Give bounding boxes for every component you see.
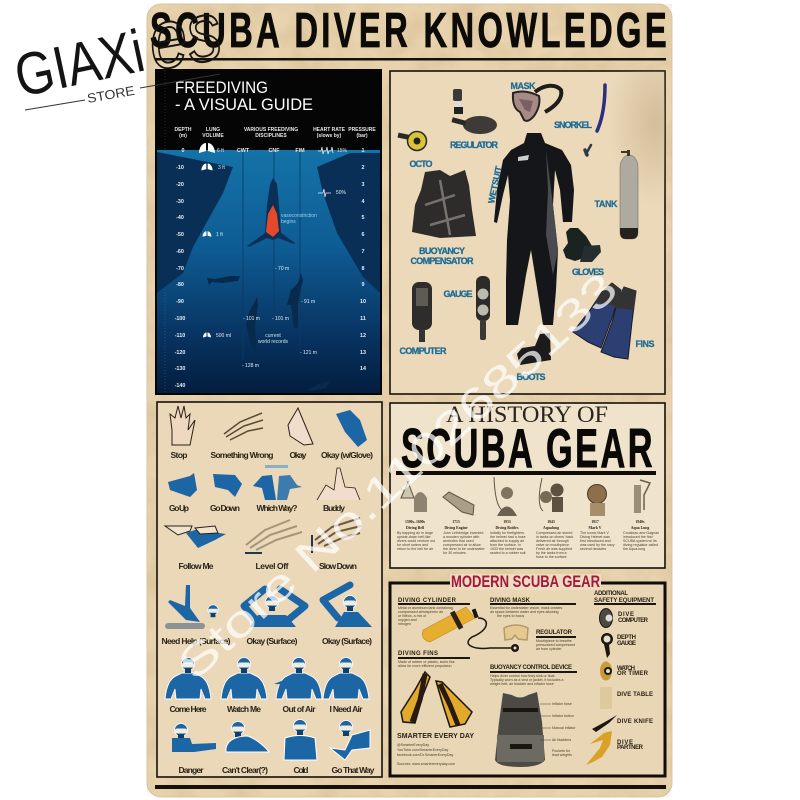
computer xyxy=(412,282,432,342)
history heading: A HISTORY OF xyxy=(446,402,608,427)
store logo: GIAXi xyxy=(9,17,150,110)
depth records: - 128 m xyxy=(242,363,259,369)
pressure scale: 4 xyxy=(362,199,364,205)
history timeline text: Aqua Lung xyxy=(631,526,649,530)
diver signals surface row xyxy=(165,585,372,629)
section text: Helps diver control how they sink or float. xyxy=(490,674,556,678)
history timeline text: John Lethbridge invented xyxy=(443,531,483,535)
history heading: SCUBA GEAR xyxy=(401,417,655,479)
signal labels: Okay (Surface) xyxy=(246,636,298,646)
heart rate xyxy=(318,147,348,197)
depth scale: -50 xyxy=(176,232,184,238)
history timeline text: first introduced and xyxy=(580,539,611,543)
pressure scale: 11 xyxy=(360,316,366,322)
signal labels: Go Down xyxy=(210,503,240,513)
history timeline text: delivered air through xyxy=(536,539,569,543)
world records note xyxy=(258,333,289,345)
section text: air from cylinder xyxy=(536,647,562,651)
depth scale: -80 xyxy=(176,282,184,288)
world records note: current xyxy=(265,333,281,339)
buoyancy compensator xyxy=(412,170,476,238)
section headings: SMARTER EVERY DAY xyxy=(397,733,474,740)
section text: Sources: www.smartereveryday.com xyxy=(397,762,455,766)
store logo xyxy=(9,0,228,110)
world records note: world records xyxy=(258,339,289,345)
depth scale: -130 xyxy=(175,366,185,372)
history timeline text: introduced the first xyxy=(623,535,653,539)
equipment labels: GLOVES xyxy=(572,267,604,277)
history timeline text: by the tanks from a xyxy=(536,551,567,555)
equipment labels: SNORKEL xyxy=(554,120,592,130)
signal labels: Watch Me xyxy=(227,704,261,714)
section text: weight belt, air bladder and inflator hose xyxy=(490,682,554,686)
depth scale: -120 xyxy=(175,350,185,356)
equipment labels: REGULATOR xyxy=(450,140,498,150)
depth scale: -70 xyxy=(176,266,184,272)
watermark: Store No.1102685133 xyxy=(169,263,627,689)
lung volumes: 3 ft xyxy=(218,165,226,171)
signal labels: Out of Air xyxy=(282,704,316,714)
history timeline text: was used by the navy xyxy=(580,543,615,547)
safety equipment labels: OR TIMER xyxy=(617,671,649,677)
signal labels xyxy=(162,450,375,775)
section headings: REGULATOR xyxy=(536,630,573,636)
gloves xyxy=(563,228,601,262)
fish and divers xyxy=(207,273,330,391)
equipment labels: COMPUTER xyxy=(400,346,447,356)
column headers: DEPTH xyxy=(175,127,192,133)
history timeline text: return to the bell for air xyxy=(397,547,434,551)
pressure scale: 10 xyxy=(360,299,366,305)
mask xyxy=(513,86,561,121)
history timeline text: Diving Bell xyxy=(406,526,424,530)
depth scale: -110 xyxy=(175,333,185,339)
diver signals row 4 xyxy=(165,658,369,699)
depth scale: -20 xyxy=(176,182,184,188)
sign background xyxy=(147,4,672,797)
history timeline text: divers could venture out xyxy=(397,539,435,543)
history timeline text: Diving Bottles xyxy=(496,526,519,530)
column headers: VOLUME xyxy=(202,133,224,139)
history timeline text: Diving Engine xyxy=(444,526,468,530)
safety equipment labels: DIVE TABLE xyxy=(617,692,653,698)
signal labels: Go That Way xyxy=(332,765,375,775)
section text: compressed atmospheric air xyxy=(398,610,444,614)
pressure scale: 6 xyxy=(362,232,364,238)
panel: modern scuba gear xyxy=(390,572,665,776)
store logo: STORE xyxy=(86,83,136,106)
history timeline text xyxy=(397,520,659,559)
section headings: BUOYANCY CONTROL DEVICE xyxy=(490,665,572,671)
safety equipment labels: PARTNER xyxy=(617,745,644,751)
section text: pressurized compressed xyxy=(536,643,575,647)
safety equipment labels xyxy=(617,612,653,751)
history heading xyxy=(396,402,656,479)
panel: equipment xyxy=(390,71,665,394)
section text: allow for more efficient propulsion xyxy=(398,664,451,668)
history timeline text: in tanks on divers' back xyxy=(536,535,573,539)
history timeline text: 1933 the helmet was xyxy=(490,547,523,551)
section text: Pockets for xyxy=(552,749,571,753)
section headings: SAFETY EQUIPMENT xyxy=(594,598,654,604)
history timeline text: the helmet had a hose xyxy=(490,535,526,539)
section text: Manual inflator xyxy=(552,726,576,730)
pressure scale: 1 xyxy=(362,148,364,154)
fins xyxy=(573,283,636,359)
safety equipment labels: WATCH xyxy=(617,666,635,672)
octo xyxy=(398,132,426,150)
rock walls xyxy=(157,152,380,293)
gauge xyxy=(476,276,490,340)
safety equipment labels: GAUGE xyxy=(617,641,636,647)
depth records: - 101 m xyxy=(272,316,289,322)
history timeline text: SCUBA system w/ its xyxy=(623,539,657,543)
section text: or Nitrox, a mix of xyxy=(398,614,426,618)
dive mask xyxy=(504,625,528,640)
cylinder and hose xyxy=(422,607,519,652)
depth records: - 70 m xyxy=(275,266,289,272)
tank xyxy=(620,150,638,239)
safety equipment labels: DIVE KNIFE xyxy=(617,719,653,725)
signal labels: Okay xyxy=(290,450,307,460)
freediving heading: - A VISUAL GUIDE xyxy=(175,95,313,114)
depth scale: -60 xyxy=(176,249,184,255)
section text: oxygen and xyxy=(398,618,417,622)
section text: air space between water and eyes allowing xyxy=(490,610,559,614)
dive fins xyxy=(401,672,472,727)
lung volumes: 1 ft xyxy=(216,232,224,238)
signal labels: Follow Me xyxy=(178,561,214,571)
section text: Mouthpiece to breathe xyxy=(536,639,572,643)
history timeline text: valve on mouthpiece xyxy=(536,543,569,547)
equipment labels: OCTO xyxy=(410,159,432,169)
modern heading: MODERN SCUBA GEAR xyxy=(451,572,600,591)
diver signals row 5 xyxy=(172,720,370,760)
equipment labels: FINS xyxy=(636,339,654,349)
history timeline text: armholes that used xyxy=(443,539,474,543)
depth scale: -90 xyxy=(176,299,184,305)
signal labels: I Need Air xyxy=(330,704,363,714)
pressure scale: 12 xyxy=(360,333,366,339)
safety equipment labels: DIVE xyxy=(618,612,634,618)
section text: facebook.com/Dr.SmarterEveryDay xyxy=(397,753,454,757)
column headers: LUNG xyxy=(206,127,220,133)
history timeline text: Diving Helmet was xyxy=(580,535,610,539)
column headers: HEART RATE xyxy=(313,127,346,133)
heart rate: 15% xyxy=(337,148,348,154)
hand signal illustrations row 3 xyxy=(165,518,361,553)
signal labels: Which Way? xyxy=(256,503,298,513)
pressure scale: 9 xyxy=(362,282,364,288)
signal labels: Okay (Surface) xyxy=(322,636,372,646)
equipment labels: COMPENSATOR xyxy=(410,256,474,266)
history timeline text: sealed to a rubber suit xyxy=(490,551,526,555)
discipline labels: FIM xyxy=(295,148,305,154)
lung volumes: 6 ft xyxy=(217,148,225,154)
history timeline text: 1715 xyxy=(452,520,460,524)
discipline labels: CWT xyxy=(237,148,250,154)
panel: hand signals xyxy=(157,402,382,777)
history timeline text: Cousteau and Gagnan xyxy=(623,531,659,535)
main diver xyxy=(247,178,295,247)
depth scale xyxy=(175,148,185,389)
signal labels: Danger xyxy=(178,765,204,775)
depth scale: -30 xyxy=(176,199,184,205)
signal labels: Can't Clear(?) xyxy=(222,765,268,775)
column headers: VARIOUS FREEDIVING xyxy=(244,127,298,133)
history timeline text: Compressed air stored xyxy=(536,531,572,535)
history timeline text: By trapping air in large xyxy=(397,531,433,535)
signal labels: Need Help (Surface) xyxy=(162,636,231,646)
column headers: (m) xyxy=(179,133,187,139)
equipment labels: MASK xyxy=(510,81,536,91)
signal labels: Come Here xyxy=(170,704,207,714)
history timeline text: a wooden cylinder with xyxy=(443,535,479,539)
safety equipment labels: COMPUTER xyxy=(618,618,649,624)
section text: nitrogen xyxy=(398,622,411,626)
section text: Air bladders xyxy=(552,738,571,742)
history timeline text: Fresh air was supplied xyxy=(536,547,572,551)
equipment labels: BUOYANCY xyxy=(419,246,465,256)
history timeline text: 1933 xyxy=(503,520,511,524)
pressure scale: 13 xyxy=(360,350,366,356)
pressure scale: 7 xyxy=(362,249,364,255)
history timeline text: Aqualung xyxy=(543,526,559,530)
history timeline text: the diver to be underwater xyxy=(443,547,486,551)
section headings: DIVING FINS xyxy=(398,651,438,657)
pressure scale xyxy=(360,148,366,372)
equipment labels: GAUGE xyxy=(444,289,472,299)
signal labels: Slow Down xyxy=(319,561,357,571)
history icons xyxy=(401,477,650,516)
boots xyxy=(517,333,551,365)
signal labels: Okay (w/Glove) xyxy=(321,450,373,460)
depth scale: -140 xyxy=(175,383,185,389)
column headers: PRESSURE xyxy=(348,127,376,133)
section text: Inflator button xyxy=(552,714,574,718)
depth records xyxy=(242,266,317,369)
history timeline text: compressed air to allow xyxy=(443,543,481,547)
discipline labels: CNF xyxy=(268,148,280,154)
heart rate: 50% xyxy=(336,190,347,196)
pressure scale: 3 xyxy=(362,182,364,188)
equipment labels: WETSUIT xyxy=(486,165,504,204)
pressure scale: 2 xyxy=(362,165,364,171)
column headers: (bar) xyxy=(356,133,368,139)
section headings: ADDITIONAL xyxy=(594,591,628,597)
history timeline text: The iconic Mark V xyxy=(580,531,609,535)
depth scale: -10 xyxy=(176,165,184,171)
pressure scale: 5 xyxy=(362,215,364,221)
history timeline text: Mark V xyxy=(589,526,602,530)
history timeline text: from the surface. In xyxy=(490,543,521,547)
buoyancy device xyxy=(495,692,551,767)
depth records: - 91 m xyxy=(301,299,315,305)
panel: history of scuba gear xyxy=(390,402,665,568)
column headers: DISCIPLINES xyxy=(255,133,287,139)
freediving heading: FREEDIVING xyxy=(175,78,268,97)
signal labels: Buddy xyxy=(323,503,345,513)
history timeline text: 1943 xyxy=(547,520,555,524)
history timeline text: 1590s–1690s xyxy=(405,520,426,524)
vasoconstriction note: begins xyxy=(281,219,296,225)
section text: Made of rubber or plastic, swim fins xyxy=(398,660,455,664)
freediving heading xyxy=(175,78,313,114)
vasoconstriction note: vasoconstriction xyxy=(281,213,317,219)
bottom rule xyxy=(155,785,666,789)
history timeline text: for 30 minutes xyxy=(443,551,466,555)
signal labels: Go Up xyxy=(169,503,189,513)
section text: Inflator hose xyxy=(552,702,572,706)
column headers xyxy=(175,127,376,139)
section text: YouTube.com/SmarterEveryDay xyxy=(397,748,448,752)
history timeline text: attached to supply air xyxy=(490,539,525,543)
depth records: - 121 m xyxy=(300,350,317,356)
history timeline text: diving regulator called xyxy=(623,543,658,547)
signal labels: Level Off xyxy=(256,561,289,571)
equipment labels: BOOTS xyxy=(516,372,546,382)
section text: lead weights xyxy=(552,753,572,757)
lung volumes xyxy=(199,143,231,339)
discipline labels xyxy=(237,148,305,154)
equipment labels xyxy=(400,81,654,382)
history timeline text: several decades xyxy=(580,547,606,551)
section text xyxy=(397,606,576,766)
depth records: - 101 m xyxy=(243,316,260,322)
history timeline text: for short swims and xyxy=(397,543,428,547)
section text: Essential for underwater vision, mask creates xyxy=(490,606,563,610)
signal labels: Something Wrong xyxy=(210,450,274,460)
column headers: (slows by) xyxy=(317,133,342,139)
safety equipment icons xyxy=(586,608,617,765)
safety equipment labels: DIVE xyxy=(617,740,633,746)
pressure scale: 14 xyxy=(360,366,366,372)
hand signal illustrations row 1 xyxy=(170,406,367,447)
hand signal illustrations row 2 xyxy=(168,465,360,500)
history timeline text: upside-down bell-like xyxy=(397,535,431,539)
history timeline text: Initially for firefighters xyxy=(490,531,524,535)
history timeline text: hose to the surface xyxy=(536,555,567,559)
history timeline text: the Aqua-lung xyxy=(623,547,645,551)
history timeline text: 1940s xyxy=(635,520,645,524)
depth scale: 0 xyxy=(182,148,184,154)
signal labels: Stop xyxy=(170,450,188,460)
section headings xyxy=(397,591,654,740)
signal labels: Cold xyxy=(294,765,308,775)
safety equipment labels: DEPTH xyxy=(617,635,636,641)
wetsuit figure xyxy=(494,133,574,325)
regulator xyxy=(451,89,497,134)
section text: Metal or aluminum tank containing xyxy=(398,606,453,610)
panel: freediving visual guide xyxy=(155,69,382,395)
pressure scale: 8 xyxy=(362,266,364,272)
history timeline text: 1917 xyxy=(591,520,599,524)
depth scale: -40 xyxy=(176,215,184,221)
section text: @SmarterEveryDay xyxy=(397,743,429,747)
snorkel xyxy=(585,85,605,155)
depth scale: -100 xyxy=(175,316,185,322)
section headings: DIVING MASK xyxy=(490,598,531,604)
equipment labels: TANK xyxy=(594,199,618,209)
vasoconstriction note xyxy=(281,213,317,225)
section text: the eyes to focus xyxy=(497,614,524,618)
lung volumes: 500 ml xyxy=(216,333,231,339)
section text: Typically worn as a vest or jacket, it includes a xyxy=(490,678,564,682)
discipline lines xyxy=(243,150,300,360)
section headings: DIVING CYLINDER xyxy=(398,598,457,604)
